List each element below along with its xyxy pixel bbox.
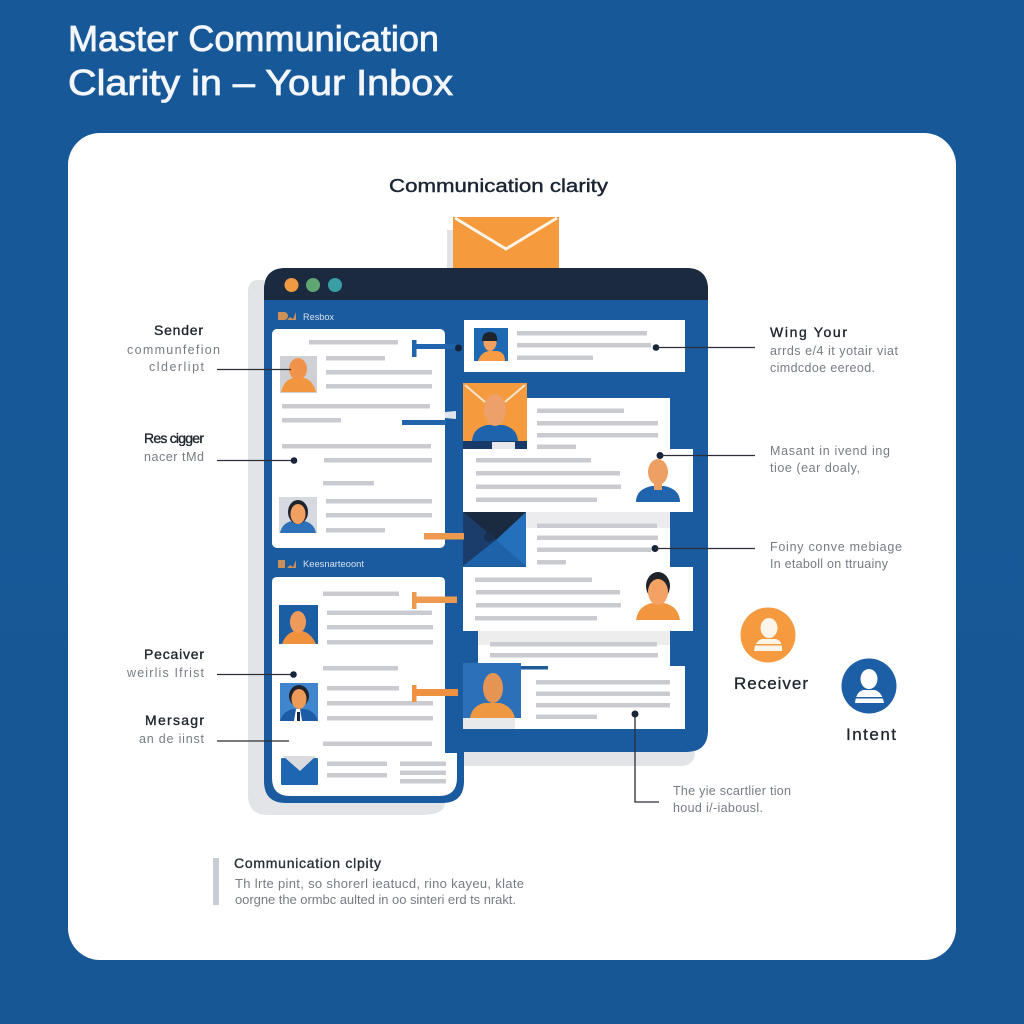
callout: wing your: cimdcdoe eereod. bbox=[770, 361, 875, 375]
callout: sender: Sender bbox=[154, 322, 203, 338]
callout: sender bbox=[127, 322, 291, 374]
label: intent: Intent bbox=[846, 725, 896, 744]
message card: top right bbox=[464, 320, 685, 372]
heading: communication clarity: Communication clarity bbox=[389, 176, 608, 196]
text block: footer note: Communication clpity bbox=[234, 855, 381, 871]
message card: sixth bbox=[478, 631, 670, 671]
callout: meant in: tioe (ear doaly, bbox=[770, 461, 860, 475]
section label: upper inbox bbox=[278, 312, 335, 322]
section label: upper inbox: Resbox bbox=[303, 312, 335, 322]
label: receiver: Receiver bbox=[734, 674, 808, 693]
inbox window bbox=[248, 268, 708, 815]
message card: second bbox=[527, 398, 670, 452]
message card: fifth bbox=[463, 567, 693, 631]
text lines bbox=[537, 524, 658, 564]
avatar: orange person on light blue bbox=[463, 663, 521, 718]
callout: conveying message: In etaboll on ttruainy bbox=[770, 557, 889, 571]
message card: fourth bbox=[526, 512, 670, 568]
callout: bottom note: houd i/-iabousl. bbox=[673, 801, 763, 815]
text lines bbox=[475, 578, 621, 620]
callout: sender: clderlipt bbox=[149, 360, 205, 374]
callout: conveying message bbox=[652, 540, 902, 571]
text lines bbox=[536, 680, 670, 719]
panel: upper message list bbox=[272, 329, 445, 548]
message card: seventh bbox=[463, 663, 685, 729]
panel: main card bbox=[68, 133, 956, 960]
text lines bbox=[517, 331, 651, 360]
connector: blue T bbox=[412, 340, 462, 357]
callout: wing your bbox=[653, 324, 899, 375]
callout: bottom note bbox=[632, 710, 791, 815]
icon: dark and blue envelope bbox=[463, 512, 526, 566]
title: Master Communication bbox=[68, 18, 439, 59]
text lines bbox=[282, 340, 432, 532]
text block: footer note: oorgne the ormbc aulted in oo sinteri erd ts nrakt. bbox=[235, 892, 516, 907]
avatar: person with dark hair bbox=[279, 497, 317, 533]
icon: receiver bbox=[740, 608, 796, 662]
callout: receiver bbox=[126, 646, 297, 680]
icon: blue envelope bbox=[281, 756, 318, 785]
text block: footer note: Th lrte pint, so shorerl ieatucd, rino kayeu, klate bbox=[235, 876, 524, 891]
panel: lower message list bbox=[272, 577, 457, 796]
callout: message trigger bbox=[144, 430, 297, 464]
window control dots bbox=[284, 278, 342, 292]
window shadow bbox=[248, 280, 695, 815]
avatar: blue shirt bbox=[636, 459, 680, 502]
title bbox=[68, 18, 453, 103]
text lines bbox=[537, 408, 658, 449]
callout: sender: communfefion bbox=[127, 343, 220, 357]
avatar: sender bbox=[280, 356, 317, 393]
icon: orange envelope with person bbox=[463, 383, 527, 450]
callout: meant in bbox=[656, 444, 890, 475]
icon: top envelope bbox=[447, 217, 559, 268]
callout: wing your: arrds e/4 it yotair viat bbox=[770, 344, 899, 358]
avatar: orange shirt bbox=[636, 572, 680, 620]
connector: orange T lower bbox=[412, 685, 458, 702]
callout: receiver: weirlis Ifrist bbox=[126, 666, 205, 680]
icon: intent bbox=[842, 658, 896, 714]
window title bar bbox=[264, 268, 708, 300]
avatar bbox=[474, 328, 508, 361]
callout: receiver: Pecaiver bbox=[144, 646, 204, 662]
callout: conveying message: Foiny conve mebiage bbox=[770, 540, 902, 554]
callout: message: Mersagr bbox=[145, 712, 204, 728]
title: Clarity in – Your Inbox bbox=[68, 62, 453, 103]
text lines bbox=[476, 458, 621, 502]
text lines bbox=[490, 642, 658, 658]
text block: footer note bbox=[213, 855, 524, 907]
callout: bottom note: The yie scartlier tion bbox=[673, 784, 791, 798]
connector: orange bar bbox=[424, 532, 494, 542]
text lines bbox=[323, 592, 446, 784]
callout: message trigger: nacer tMd bbox=[144, 450, 204, 464]
connector: blue bar bbox=[402, 411, 456, 425]
avatar: person in suit bbox=[280, 683, 318, 721]
window body bbox=[264, 268, 708, 803]
section label: lower inbox bbox=[278, 559, 365, 569]
callout: message bbox=[139, 712, 289, 746]
callout: wing your: Wing Your bbox=[770, 324, 847, 340]
callout: meant in: Masant in ivend ing bbox=[770, 444, 890, 458]
connector: orange T upper bbox=[412, 592, 457, 609]
callout: message trigger: Res cigger bbox=[144, 430, 204, 446]
message card: third bbox=[463, 449, 693, 512]
section label: lower inbox: Keesnarteoont bbox=[303, 559, 365, 569]
avatar: orange person on blue bbox=[279, 605, 318, 644]
callout: message: an de iinst bbox=[139, 732, 205, 746]
